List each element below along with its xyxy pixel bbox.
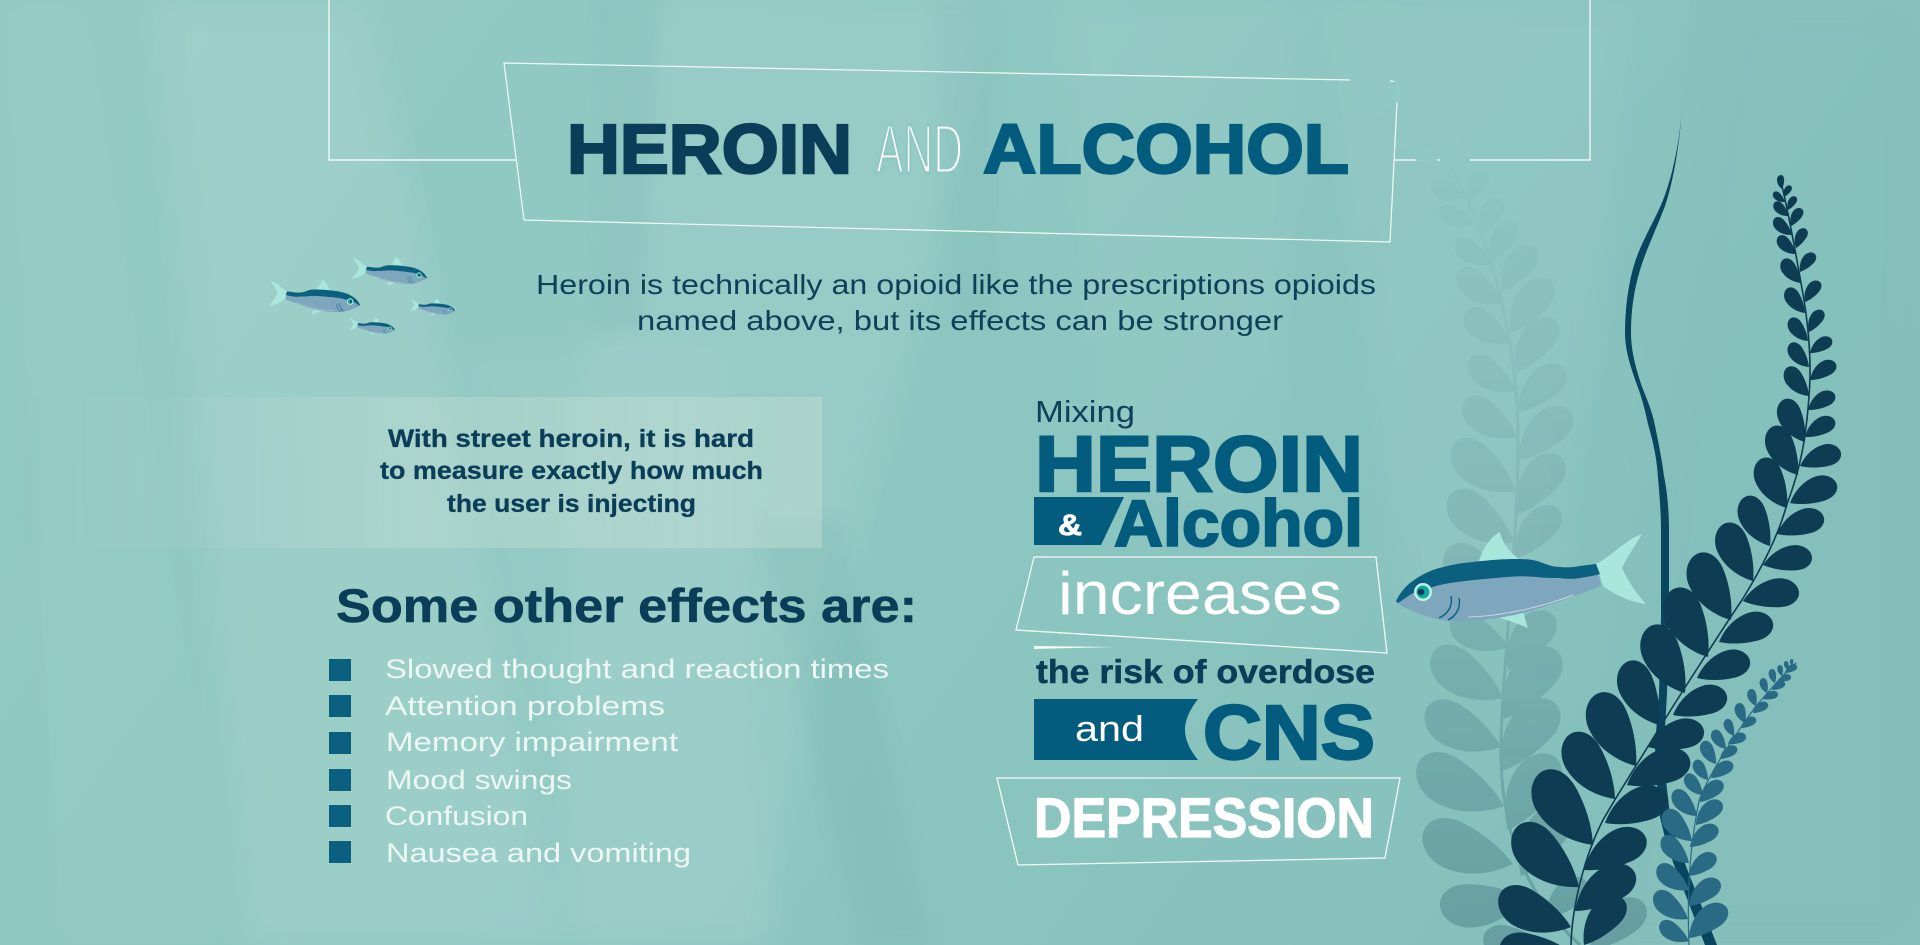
small fern [1648, 659, 1798, 945]
large dark fern [1490, 175, 1844, 945]
intro text: named above, but its effects can be stronger [637, 305, 1283, 336]
title [567, 110, 1349, 188]
bullets [329, 659, 351, 863]
list items [385, 654, 889, 868]
effects heading: Some other effects are: [336, 579, 917, 632]
and badge [1034, 699, 1198, 760]
icon: fish 4 [349, 317, 395, 335]
increases box: increases [1058, 560, 1342, 627]
ampersand badge [1034, 497, 1124, 545]
top frame outline [329, 0, 1590, 160]
title word: ALCOHOL: ALCOHOL [983, 110, 1349, 188]
faded fern top leaves over frame [1336, 53, 1464, 173]
icon: fish 1 [269, 280, 360, 315]
callout panel [0, 397, 822, 548]
intro text [536, 269, 1376, 336]
text: Mixing: Mixing [1035, 394, 1135, 429]
and badge: and [1075, 708, 1144, 749]
icon: large fish [1396, 532, 1646, 628]
callout text: to measure exactly how much [380, 457, 763, 485]
depression box [997, 778, 1400, 865]
icon: fish 3 [410, 298, 455, 316]
text: the risk of overdose: the risk of overdose [1036, 653, 1375, 690]
list items: Slowed thought and reaction times [385, 654, 889, 684]
text: HEROIN: HEROIN [1035, 419, 1363, 508]
effects list [329, 654, 889, 868]
callout text: the user is injecting [447, 490, 696, 518]
intro text: Heroin is technically an opioid like the prescriptions opioids [536, 269, 1376, 300]
school of small fish [269, 257, 455, 335]
icon: fish 2 [352, 257, 427, 286]
title box outline [504, 63, 1398, 242]
faded background fern [1416, 381, 1647, 945]
accent line [1034, 646, 1114, 649]
text: Alcohol: Alcohol [1114, 486, 1363, 560]
list items: Attention problems [385, 691, 665, 721]
tall kelp strand [1625, 108, 1717, 945]
increases box [1016, 557, 1387, 653]
Mixing headline block [997, 394, 1400, 865]
title word: AND: AND [876, 110, 963, 188]
callout text: With street heroin, it is hard [388, 425, 754, 453]
title word: HEROIN: HEROIN [567, 110, 852, 188]
ampersand badge: & [1058, 509, 1082, 542]
callout text [380, 425, 763, 518]
list items: Nausea and vomiting [386, 838, 691, 868]
list items: Memory impairment [386, 727, 679, 757]
list items: Mood swings [386, 765, 572, 795]
list items: Confusion [385, 801, 528, 831]
text: CNS: CNS [1203, 690, 1375, 776]
depression box: DEPRESSION [1034, 786, 1374, 849]
